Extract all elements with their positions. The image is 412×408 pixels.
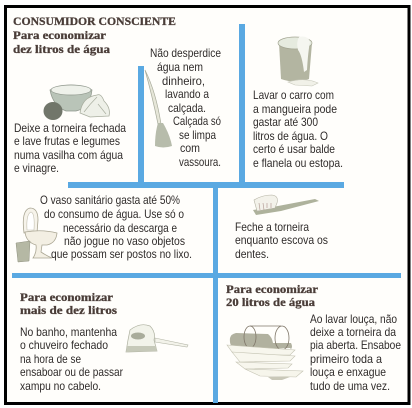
text: calçada: Calçada só bbox=[173, 114, 221, 128]
text: lavar o carro: e flanela ou estopa. bbox=[253, 156, 343, 170]
text: lavar louça: louça e enxague bbox=[310, 365, 386, 379]
icon: toothbrush bbox=[253, 195, 319, 215]
text: banho: No banho, mantenha bbox=[20, 325, 117, 339]
text: calçada: dinheiro, bbox=[162, 74, 205, 88]
text: vaso sanitário: do consumo de água. Use só o bbox=[44, 207, 184, 221]
text: vaso sanitário bbox=[40, 193, 192, 261]
text: vaso sanitário: não jogue no vaso objetos bbox=[64, 234, 185, 248]
text: banho: xampu no cabelo. bbox=[20, 379, 101, 393]
heading: 20 litros: 20 litros de água bbox=[226, 295, 315, 309]
icon: shower head bbox=[126, 325, 188, 352]
heading: dez litros: dez litros de água bbox=[13, 42, 110, 56]
text: frutas e legumes: Deixe a torneira fechada bbox=[14, 121, 126, 135]
text: lavar louça: tudo de uma vez. bbox=[310, 379, 390, 393]
title: CONSUMIDOR CONSCIENTE bbox=[13, 14, 176, 28]
text: calçada bbox=[150, 46, 221, 169]
heading: mais de dez litros: mais de dez litros bbox=[20, 303, 117, 317]
text: frutas e legumes: numa vasilha com água bbox=[14, 148, 123, 162]
text: calçada: vassoura. bbox=[179, 155, 221, 169]
text: fecha a torneira: Feche a torneira bbox=[235, 220, 309, 234]
text: fecha a torneira: dentes. bbox=[235, 247, 269, 261]
text: calçada: Não desperdice bbox=[150, 46, 221, 60]
text: calçada: se limpa bbox=[179, 128, 216, 142]
text: lavar o carro bbox=[253, 88, 343, 170]
text: lavar o carro: gastar até 300 bbox=[253, 115, 318, 129]
text: vaso sanitário: O vaso sanitário gasta até 50% bbox=[40, 193, 180, 207]
text: fecha a torneira: enquanto escova os bbox=[235, 233, 328, 247]
text: calçada: calçada. bbox=[168, 101, 206, 115]
heading: 20 litros bbox=[226, 282, 319, 309]
icon: bowl with fruit and greens bbox=[44, 85, 109, 120]
text: lavar o carro: a mangueira pode bbox=[253, 102, 337, 116]
text: calçada: com bbox=[180, 141, 200, 155]
text: lavar o carro: Lavar o carro com bbox=[253, 88, 334, 102]
text: frutas e legumes: e lave frutas e legumes bbox=[14, 134, 120, 148]
text: lavar louça: Ao lavar louça, não bbox=[310, 312, 397, 326]
text: vaso sanitário: que possam ser postos no lixo. bbox=[51, 247, 192, 261]
text: lavar o carro: certo é usar balde bbox=[253, 142, 335, 156]
icon: stacked dishes bbox=[227, 326, 303, 380]
text: banho: na hora de se bbox=[20, 352, 81, 366]
heading: dez litros bbox=[13, 28, 110, 56]
text: banho: o chuveiro fechado bbox=[20, 338, 108, 352]
text: lavar louça: primeiro toda a bbox=[310, 352, 382, 366]
heading: mais de dez litros: Para economizar bbox=[20, 290, 114, 304]
text: calçada: lavando a bbox=[165, 87, 209, 101]
icon: bucket with cloth bbox=[278, 37, 318, 86]
heading: 20 litros: Para economizar bbox=[226, 282, 319, 296]
text: calçada: água nem bbox=[157, 60, 203, 74]
text: frutas e legumes bbox=[14, 121, 126, 175]
text: frutas e legumes: e vinagre. bbox=[14, 161, 59, 175]
heading: dez litros: Para economizar bbox=[13, 28, 107, 42]
text: fecha a torneira bbox=[235, 220, 328, 261]
text: banho bbox=[20, 325, 123, 393]
icon: toilet and bin bbox=[16, 208, 57, 262]
text: banho: ensaboar ou de passar bbox=[20, 365, 123, 379]
text: lavar louça bbox=[310, 312, 401, 393]
text: vaso sanitário: necessário da descarga e bbox=[63, 221, 177, 235]
text: lavar louça: deixe a torneira da bbox=[310, 325, 396, 339]
heading: mais de dez litros bbox=[20, 290, 117, 317]
icon: broom bbox=[145, 70, 172, 148]
text: lavar o carro: litros de água. O bbox=[253, 129, 328, 143]
